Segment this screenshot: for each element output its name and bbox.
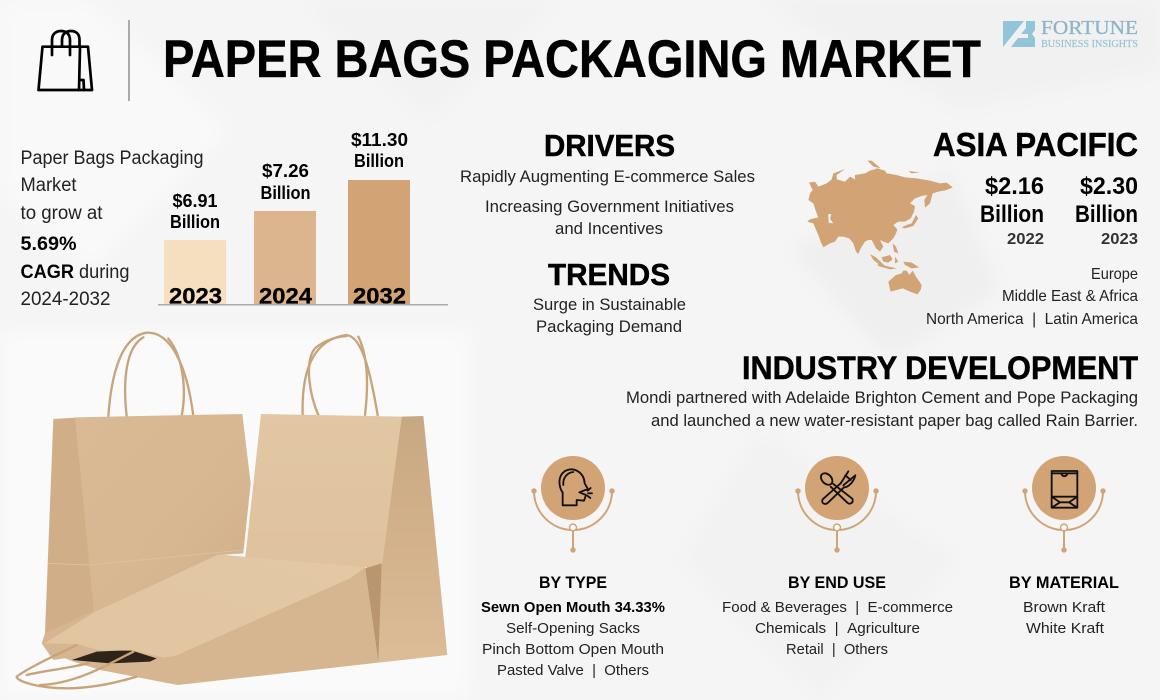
- text block: drivers: [460, 167, 755, 238]
- text block: other regions: Europe: [1091, 266, 1138, 283]
- stat: 2023: $2.30: [1080, 173, 1138, 200]
- segment: by material: White Kraft: [1026, 620, 1105, 637]
- segment: by type: Sewn Open Mouth 34.33%: [481, 599, 665, 616]
- stat: 2023: Billion: [1075, 201, 1138, 228]
- text block: trends: [533, 295, 686, 336]
- stat: 2023: [1075, 173, 1138, 248]
- text block: industry development: and launched a new water-resistant paper bag called Rain Barrier.: [651, 411, 1138, 430]
- text block: CAGR summary: 5.69%: [20, 234, 77, 255]
- heading: trends: TRENDS: [548, 257, 670, 292]
- text block: trends: Packaging Demand: [536, 317, 682, 336]
- bar: 2032: [348, 130, 410, 308]
- segment: by end use: Chemicals | Agriculture: [755, 620, 920, 637]
- icon: paper sack: [1022, 456, 1106, 553]
- text block: drivers: and Incentives: [555, 219, 663, 238]
- segment: by material: Brown Kraft: [1023, 599, 1106, 616]
- text block: industry development: [626, 388, 1138, 430]
- text block: other regions: [926, 266, 1138, 328]
- segment: by end use: Retail | Others: [786, 641, 888, 658]
- segment: by type: Pasted Valve | Others: [497, 662, 649, 679]
- stat: 2022: $2.16: [985, 173, 1044, 200]
- text block: trends: Surge in Sustainable: [533, 295, 686, 314]
- map: Asia Pacific: [807, 161, 953, 294]
- text block: CAGR summary: Market: [20, 175, 77, 196]
- bar: 2023: 2023: [169, 284, 222, 308]
- segment: by type: [481, 573, 665, 679]
- bar: 2023: $6.91: [172, 191, 218, 211]
- bar: 2023: Billion: [170, 212, 220, 232]
- icon: spoon and fork: [795, 456, 879, 553]
- icon: shopping bag: [38, 31, 92, 90]
- bar: 2032: Billion: [354, 151, 404, 171]
- bar: 2024: [254, 161, 316, 308]
- illustration: paper bags: [17, 333, 447, 688]
- stat: 2022: 2022: [1007, 231, 1044, 248]
- segment: by type: Self-Opening Sacks: [506, 620, 640, 637]
- text block: CAGR summary: 2024-2032: [20, 289, 110, 310]
- text block: CAGR summary: to grow at: [20, 203, 103, 224]
- bar: 2024: 2024: [259, 284, 313, 308]
- segment: by type: Pinch Bottom Open Mouth: [482, 641, 664, 658]
- bar: 2023: [164, 191, 226, 308]
- bar chart: [158, 130, 448, 308]
- bar: 2024: Billion: [260, 183, 310, 203]
- bar: 2024: $7.26: [262, 161, 309, 181]
- segment: by end use: [722, 573, 953, 658]
- divider: [128, 20, 130, 101]
- text block: CAGR summary: [20, 148, 204, 310]
- logo: Fortune Business Insights: BUSINESS INSIGHTS: [1041, 39, 1138, 50]
- text block: other regions: Middle East & Africa: [1002, 288, 1138, 305]
- stat: 2023: 2023: [1101, 231, 1138, 248]
- text block: other regions: North America | Latin America: [926, 311, 1138, 328]
- heading: drivers: DRIVERS: [544, 128, 675, 163]
- text block: drivers: Increasing Government Initiatives: [485, 197, 734, 216]
- heading: Asia Pacific: ASIA PACIFIC: [933, 126, 1138, 163]
- text block: CAGR summary: Paper Bags Packaging: [20, 148, 204, 169]
- text block: industry development: Mondi partnered with Adelaide Brighton Cement and Pope Packaging: [626, 388, 1138, 407]
- segment: by material: BY MATERIAL: [1009, 573, 1119, 592]
- bar: 2032: $11.30: [351, 130, 408, 150]
- title: PAPER BAGS PACKAGING MARKET: [163, 30, 981, 89]
- text block: CAGR summary: CAGR during: [20, 262, 130, 283]
- segment: by end use: BY END USE: [788, 573, 886, 592]
- segment: by end use: Food & Beverages | E-commerce: [722, 599, 953, 616]
- segment: by material: [1009, 573, 1119, 637]
- logo: Fortune Business Insights: [1003, 17, 1138, 50]
- icon: speaking head: [531, 456, 615, 553]
- logo: Fortune Business Insights: FORTUNE: [1041, 17, 1138, 39]
- segment: by type: BY TYPE: [539, 573, 607, 592]
- bar: 2032: 2032: [353, 284, 406, 308]
- heading: industry development: INDUSTRY DEVELOPMENT: [742, 350, 1138, 386]
- stat: 2022: Billion: [980, 201, 1044, 228]
- text block: drivers: Rapidly Augmenting E-commerce Sales: [460, 167, 755, 186]
- stat: 2022: [980, 173, 1044, 248]
